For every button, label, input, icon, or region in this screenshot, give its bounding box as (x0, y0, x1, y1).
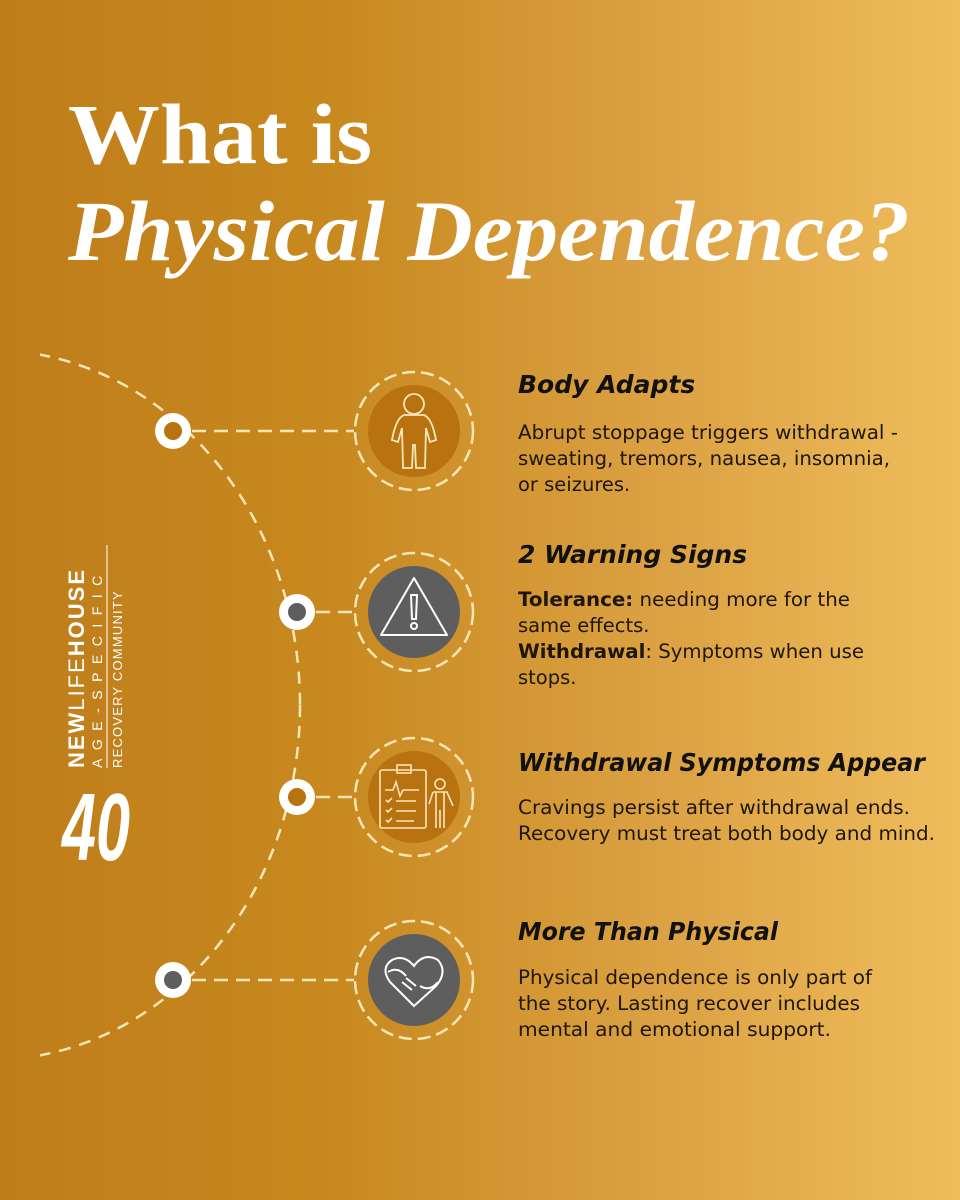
text: body adapts (518, 370, 898, 496)
text: body adapts: or seizures. (518, 473, 630, 496)
title: What is (68, 86, 372, 182)
icon: heart hands (355, 921, 473, 1039)
text: more than physical: mental and emotional support. (518, 1018, 831, 1041)
text: withdrawal symptoms: Cravings persist after withdrawal ends. (518, 796, 910, 819)
icon: warning (355, 553, 473, 671)
icon: clipboard (355, 738, 473, 856)
dashed arc (40, 353, 302, 1057)
logo (61, 545, 130, 881)
text: more than physical: Physical dependence is only part of (518, 966, 873, 989)
connector lines (192, 431, 354, 980)
text: more than physical: the story. Lasting recover includes (518, 992, 860, 1015)
text: withdrawal symptoms: Withdrawal Symptoms Appear (518, 748, 927, 777)
text: warning signs: same effects. (518, 614, 649, 637)
title (67, 86, 910, 279)
logo: AGE-SPECIFIC (89, 567, 105, 768)
logo: NEWLIFEHOUSE (64, 568, 89, 768)
text: warning signs: stops. (518, 666, 576, 689)
text: body adapts: Abrupt stoppage triggers withdrawal - (518, 421, 898, 444)
text: warning signs (518, 540, 864, 689)
text: body adapts: sweating, tremors, nausea, insomnia, (518, 447, 890, 470)
logo: 40 (61, 774, 130, 881)
text: withdrawal symptoms: Recovery must treat both body and mind. (518, 822, 935, 845)
text: warning signs: Tolerance: needing more for the (518, 588, 850, 611)
node 3 (279, 779, 315, 815)
text: more than physical: More Than Physical (518, 917, 778, 946)
text: body adapts: Body Adapts (518, 370, 695, 399)
text: warning signs: 2 Warning Signs (518, 540, 747, 569)
node 2 (279, 594, 315, 630)
text: withdrawal symptoms (518, 748, 935, 845)
text: more than physical (518, 917, 873, 1041)
title: Physical Dependence? (67, 183, 910, 279)
text: warning signs: Withdrawal: Symptoms when use (518, 640, 864, 663)
logo: RECOVERY COMMUNITY (110, 590, 125, 768)
icon: body (355, 372, 473, 490)
node 4 (155, 962, 191, 998)
node 1 (155, 413, 191, 449)
